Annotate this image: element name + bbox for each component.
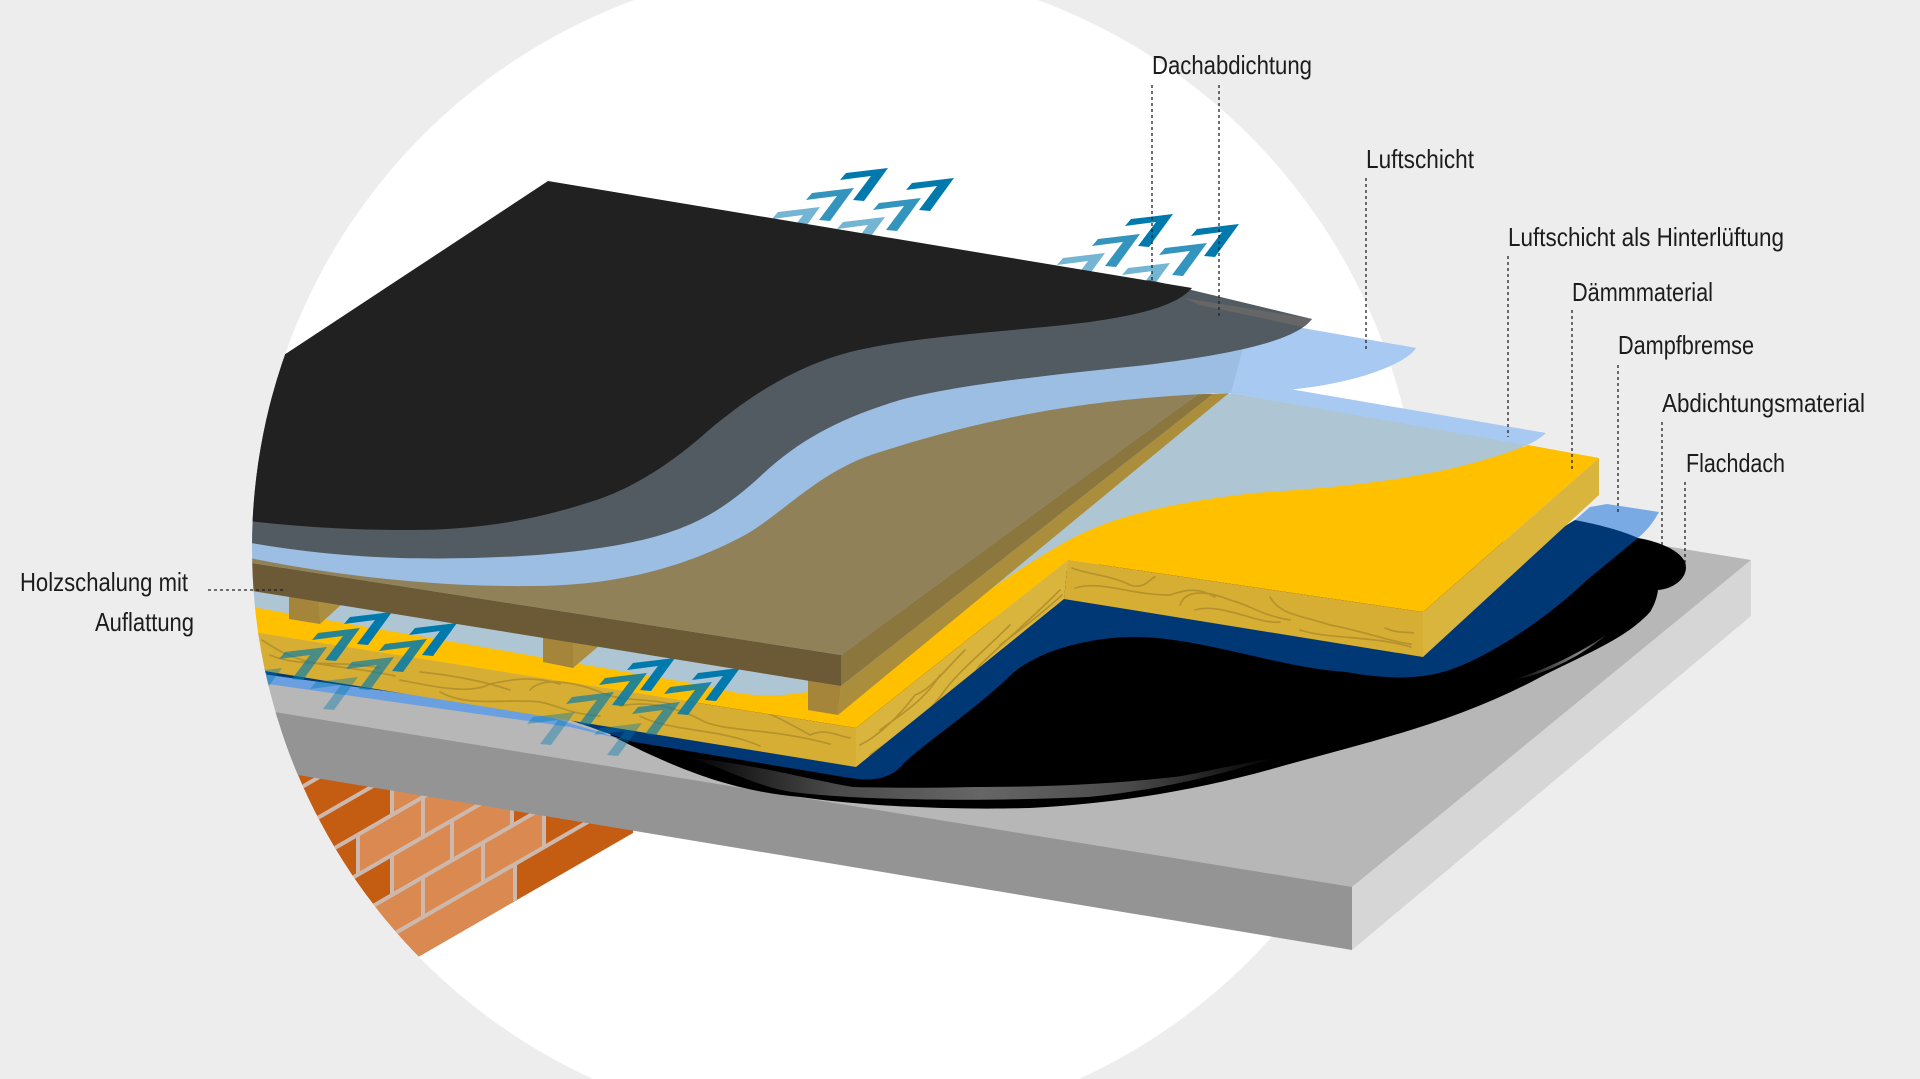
label: Luftschicht: Luftschicht — [1366, 144, 1475, 174]
roof membrane: top sheet — [200, 181, 1192, 530]
label: Dachabdichtung: Dachabdichtung — [1152, 50, 1312, 80]
label: Auflattung: Auflattung — [95, 607, 194, 637]
roof membrane: second sheet — [240, 280, 1312, 558]
insulation: wood wool faces — [240, 458, 1599, 767]
ventilation air layer — [240, 384, 1546, 720]
highlight on waterproofing — [686, 634, 1607, 800]
label: Luftschicht als Hinterlüftung: Luftschicht als Hinterlüftung — [1508, 222, 1784, 252]
vapour barrier: dark blue — [262, 520, 1638, 779]
label: Abdichtungsmaterial: Abdichtungsmaterial — [1662, 388, 1865, 418]
air layer sheet — [240, 305, 1416, 586]
insulation: yellow top — [240, 445, 1599, 728]
slab: Flachdach — [255, 542, 1751, 950]
leader lines — [208, 85, 1685, 590]
label: Dämmmaterial: Dämmmaterial — [1572, 277, 1713, 307]
label: Holzschalung mit: Holzschalung mit — [20, 567, 189, 597]
brick wall — [282, 732, 634, 956]
lower airflow arrows: right group — [527, 658, 740, 756]
upper airflow arrows — [772, 168, 1239, 282]
battens — [289, 590, 841, 715]
lower airflow arrows: left group — [265, 612, 456, 710]
label: Dampfbremse: Dampfbremse — [1618, 330, 1754, 360]
insulation grain — [261, 567, 1414, 756]
white circle — [252, 0, 1420, 1079]
artwork — [252, 168, 1751, 956]
wood boarding: plank — [240, 380, 1229, 715]
vapour barrier: light blue edges — [262, 504, 1659, 740]
label: Flachdach: Flachdach — [1686, 448, 1785, 478]
waterproofing material: black layer — [610, 537, 1686, 809]
